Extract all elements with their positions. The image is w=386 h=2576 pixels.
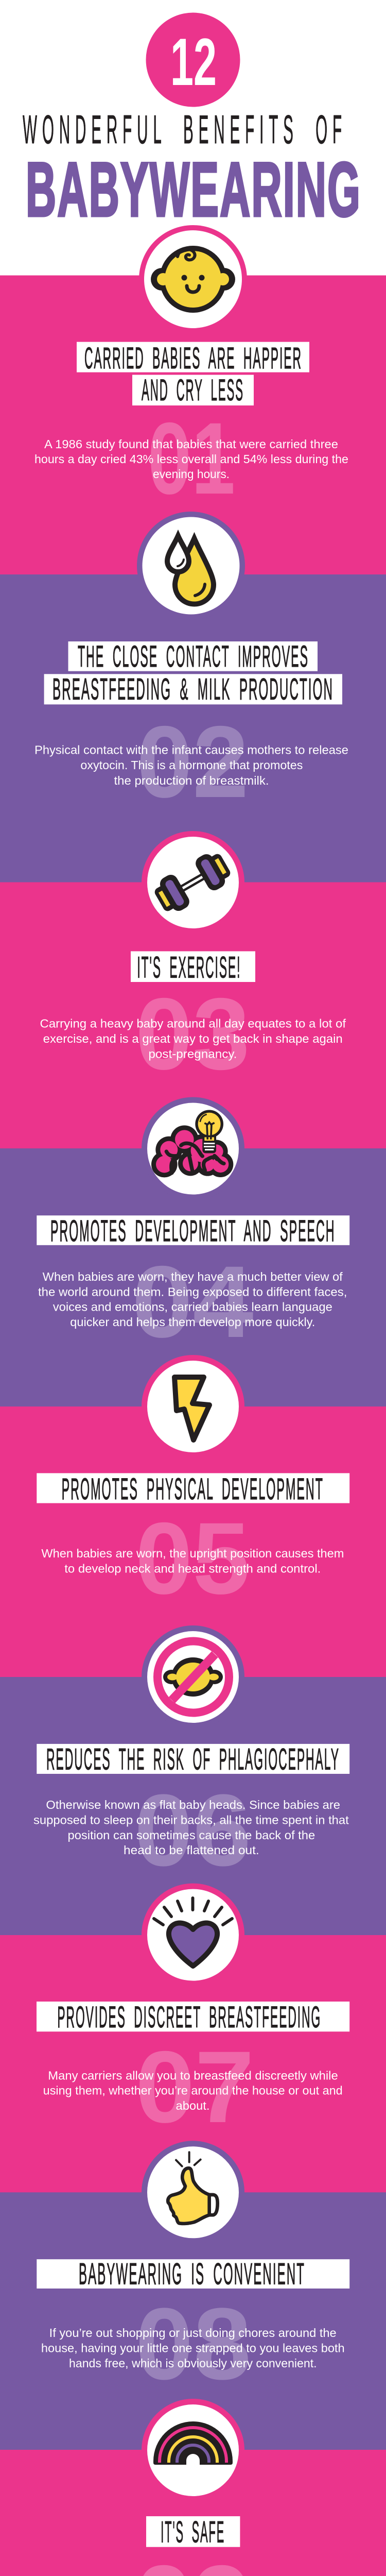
panel: benefit 7 [0,1884,386,2193]
icon: rainbow [153,2421,233,2465]
panel: benefit 4 [0,1097,386,1406]
icon: brain and light bulb [151,1110,233,1177]
number 04: 04 [132,1245,254,1359]
icon: lightning bolt [174,1377,209,1440]
body text: evening hours. [153,467,230,481]
body text: Physical contact with the infant causes mothers to release [34,743,348,756]
icon: baby face [151,246,235,313]
body text: Carrying a heavy baby around all day equates to a lot of [40,1016,346,1030]
heading [131,951,255,985]
body text: oxytocin. This is a hormone that promotes [80,758,303,772]
body text: head to be flattened out. [124,1843,259,1857]
body text: supposed to sleep on their backs, all the time spent in that [33,1814,349,1827]
number 05: 05 [135,1501,250,1615]
body text [34,437,348,481]
panel: benefit 2 [0,512,386,882]
body text: the world around them. Being exposed to different faces, [38,1285,347,1299]
body text: hours a day cried 43% less overall and 54% less during the [34,452,348,466]
panel: benefit 5 [0,1355,386,1677]
body text: house, having your little one strapped to you leaves both [41,2342,345,2355]
icon: no flat head [157,1641,229,1713]
header [23,12,361,232]
heading [77,342,309,407]
number 08: 08 [135,2287,251,2401]
body text: exercise, and is a great way to get back in shape again [43,1032,343,1045]
body text [41,1547,344,1575]
body text: When babies are worn, they have a much better view of [43,1270,343,1283]
body text: using them, whether you’re around the house or out and [43,2083,343,2097]
badge: 12 [146,12,240,107]
panel: benefit 6 [0,1625,386,1935]
icon: heart with rays [154,1898,232,1966]
number 07: 07 [135,2030,254,2144]
body text: If you’re out shopping or just doing chores around the [49,2326,337,2340]
icon: milk drops [167,536,214,604]
number 03: 03 [135,977,250,1091]
panel: benefit 1 [0,225,386,575]
body text: post-pregnancy. [148,1047,237,1060]
body text [40,1016,346,1060]
number 06: 06 [134,1773,251,1887]
body text: the production of breastmilk. [114,774,269,787]
body text: quicker and helps them develop more quickly. [70,1315,315,1329]
body text [38,1270,347,1329]
heading [44,640,342,706]
body text: voices and emotions, carried babies learn language [53,1300,332,1313]
panel: benefit 3 [0,831,386,1149]
body text: Many carriers allow you to breastfeed discreetly while [48,2069,338,2082]
icon: dumbbell [150,848,235,918]
panel: benefit 9: IT'S SAFE [161,2516,225,2549]
body text: position can sometimes cause the back of the [68,1828,315,1842]
body text: to develop neck and head strength and control. [64,1562,321,1575]
body text: A 1986 study found that babies that were carried three [44,437,338,451]
body text [43,2069,343,2112]
number 01: 01 [148,401,235,515]
heading [146,2516,240,2549]
badge: 12: 12 [170,24,217,99]
panel: benefit 9 [0,2399,386,2576]
number 02: 02 [137,705,249,819]
body text: hands free, which is obviously very convenient. [69,2357,317,2370]
body text: about. [176,2099,210,2112]
body text [41,2326,345,2370]
body text [34,743,348,787]
panel: benefit 8 [0,2141,386,2450]
body text: When babies are worn, the upright position causes them [41,1547,344,1560]
body text: Otherwise known as flat baby heads. Since babies are [46,1798,340,1811]
icon: thumbs up [168,2152,218,2224]
body text [33,1798,349,1857]
